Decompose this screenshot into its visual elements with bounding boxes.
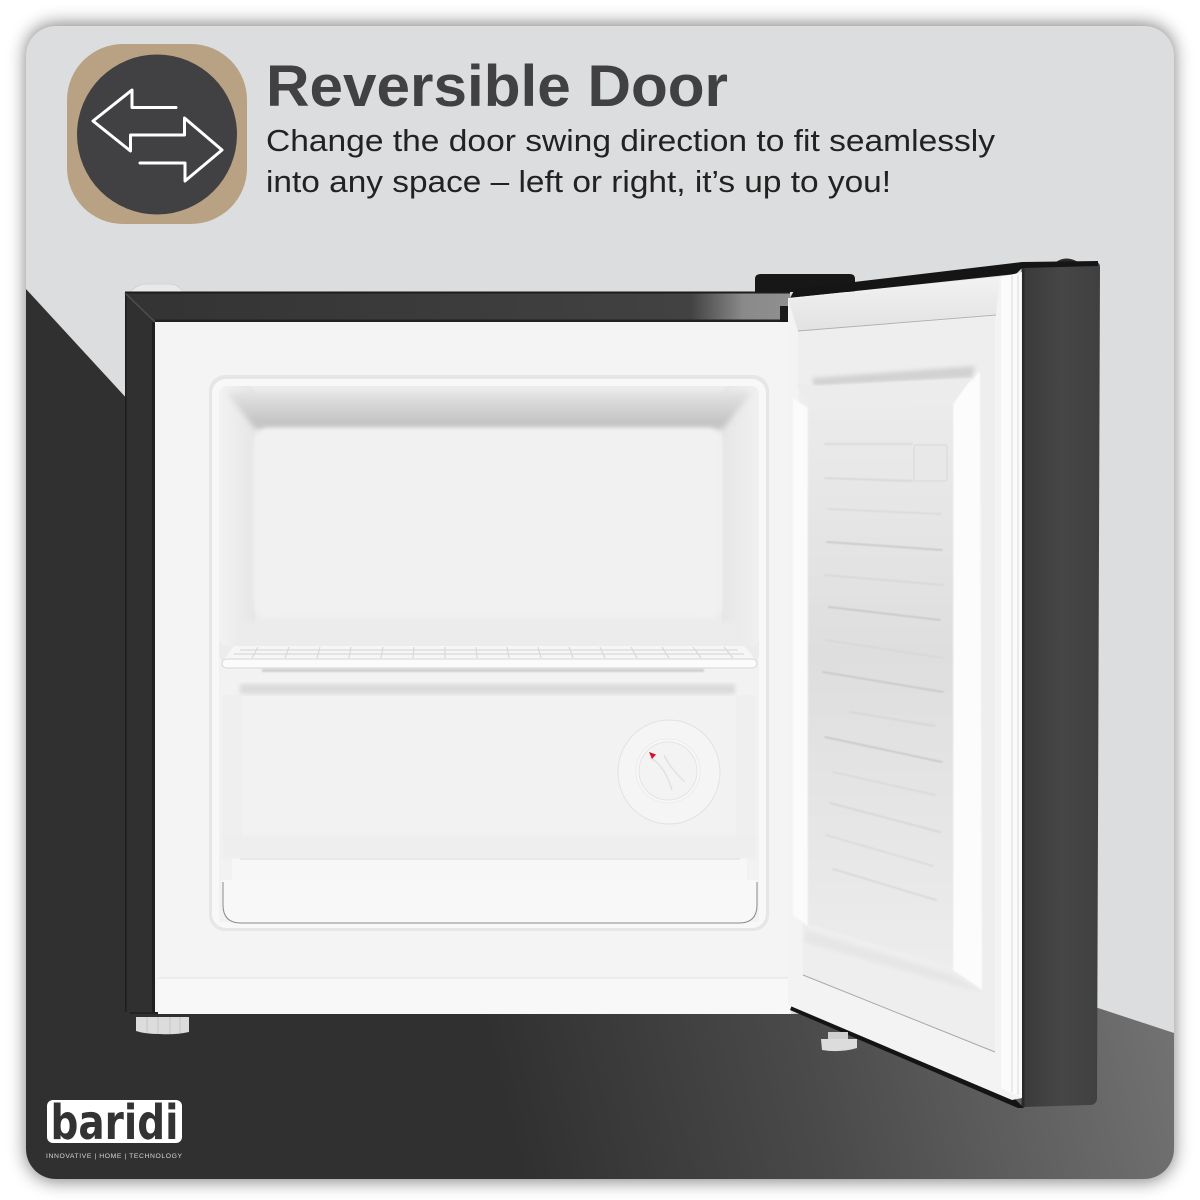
door top black strip <box>790 261 1098 298</box>
dark diagonal backdrop and floor <box>26 289 1174 1179</box>
door outer dark edge <box>1022 262 1100 1107</box>
brand logo: baridi <box>50 1095 178 1151</box>
white liner <box>155 322 791 1014</box>
door foot <box>821 1039 857 1051</box>
upper cavity <box>219 386 759 666</box>
door ledge shading <box>812 366 975 386</box>
lower cavity <box>219 660 759 922</box>
top hinge cap <box>130 284 183 292</box>
door inner panel <box>808 496 954 840</box>
brand tagline: INNOVATIVE | HOME | TECHNOLOGY <box>46 1153 182 1160</box>
red pointer <box>649 752 656 759</box>
door side strips <box>798 402 808 925</box>
temperature dial <box>618 720 720 824</box>
freezer compartment <box>209 375 769 931</box>
door lower ledge <box>804 930 982 992</box>
top black frame <box>125 292 790 322</box>
description text: Change the door swing direction to fit seamlessly <box>266 123 996 158</box>
upper back wall <box>254 428 722 618</box>
description text <box>266 123 996 199</box>
door liner <box>788 272 1022 1100</box>
left black side <box>125 294 156 1012</box>
fridge body <box>125 284 791 1034</box>
title: Reversible Door <box>266 54 728 119</box>
door top hinge <box>755 274 855 292</box>
door top panel <box>789 301 997 330</box>
left foot <box>136 1017 189 1034</box>
icon: reversible door arrows badge <box>67 44 247 224</box>
open door <box>755 258 1100 1108</box>
door bottom black strip <box>790 1005 1024 1108</box>
description text: into any space – left or right, it’s up to you! <box>266 164 891 199</box>
upper ceiling shade <box>226 392 752 430</box>
door emboss label <box>914 445 947 481</box>
door gasket <box>1003 276 1008 277</box>
door ribs <box>823 444 943 900</box>
crisper tray <box>222 835 757 923</box>
wire shelf <box>222 646 757 672</box>
door moulded recess <box>798 316 995 1052</box>
cavity outer rim <box>209 375 769 931</box>
